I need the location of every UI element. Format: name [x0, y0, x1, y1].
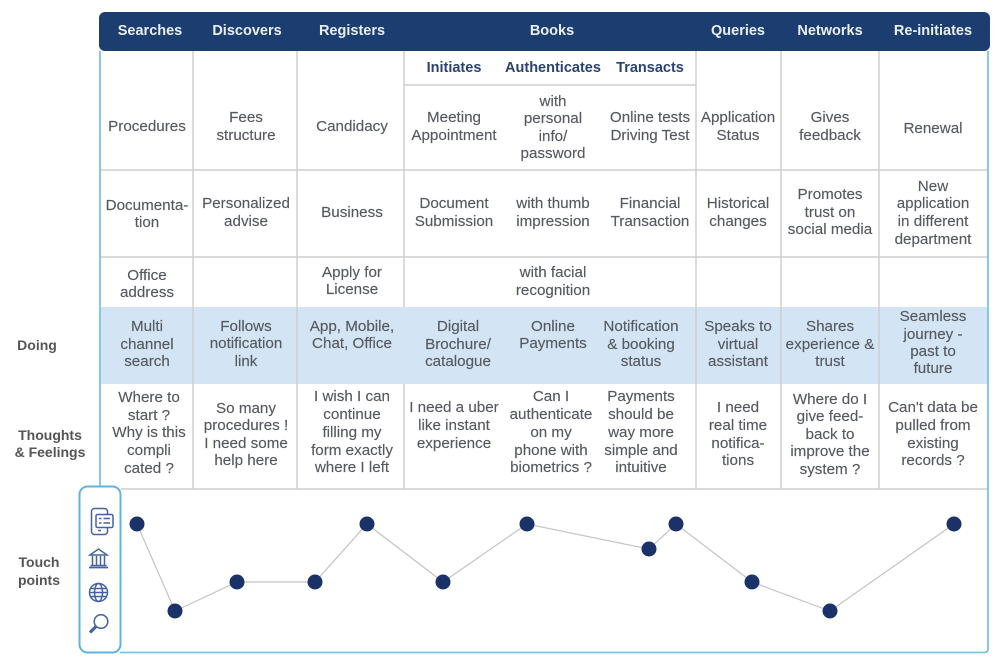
row: thoughts and feelings: biometrics ?	[510, 459, 592, 476]
row: doing: Chat, Office	[312, 335, 392, 352]
row: thoughts and feelings: Can I	[533, 388, 569, 405]
row: thoughts and feelings: I need some	[204, 435, 288, 452]
row: second actions: with thumb	[515, 195, 590, 212]
header bar: Re-initiates	[894, 23, 972, 39]
row: second actions: advise	[224, 213, 268, 230]
row label: touch points	[18, 554, 60, 588]
row: third actions: License	[326, 281, 378, 298]
header bar	[99, 12, 990, 51]
row: thoughts and feelings: where I left	[314, 459, 390, 476]
row: first actions: personal	[524, 110, 582, 127]
row: thoughts and feelings: Where do I	[793, 391, 867, 408]
row: second actions: Personalized	[202, 195, 290, 212]
row: doing: link	[235, 353, 258, 370]
row: doing: Brochure/	[425, 336, 492, 353]
row: thoughts and feelings: should be	[608, 406, 674, 423]
row: thoughts and feelings: help here	[214, 452, 278, 469]
row: doing: Speaks to	[704, 318, 772, 335]
row: thoughts and feelings: system ?	[800, 461, 860, 478]
row: thoughts and feelings: real time	[709, 417, 767, 434]
row: first actions: Meeting	[427, 109, 481, 126]
row: thoughts and feelings: existing	[907, 435, 959, 452]
row: third actions: Apply for	[322, 264, 382, 281]
row: doing: Multi	[131, 318, 163, 335]
icon: mobile payment	[92, 508, 113, 534]
row: thoughts and feelings: phone with	[514, 442, 588, 459]
row: first actions: Fees	[229, 109, 263, 126]
row: first actions: password	[520, 145, 586, 162]
row label: doing: Doing	[17, 337, 57, 353]
row: doing: status	[621, 353, 662, 370]
row: second actions: department	[895, 231, 972, 248]
row: thoughts and feelings: I need a uber	[409, 399, 499, 416]
header bar: Queries	[711, 23, 765, 39]
row: thoughts and feelings: like instant	[418, 417, 491, 434]
row: second actions: application	[897, 195, 969, 212]
row: thoughts and feelings	[112, 388, 978, 478]
row: doing: App, Mobile,	[310, 318, 394, 335]
row: doing: search	[124, 353, 170, 370]
row: thoughts and feelings: I wish I can	[314, 388, 390, 405]
row: doing: experience &	[786, 336, 874, 353]
row: first actions: Application	[701, 109, 775, 126]
books sub-headings: Authenticates	[505, 60, 601, 76]
row: doing: channel	[120, 336, 174, 353]
row: doing: notification	[210, 335, 282, 352]
row: second actions: impression	[516, 213, 590, 230]
row: first actions: feedback	[799, 127, 861, 144]
row: second actions: social media	[788, 221, 873, 238]
row: thoughts and feelings: simple and	[604, 442, 678, 459]
row: doing: Seamless	[900, 308, 967, 325]
row: second actions: Documenta-	[106, 197, 188, 214]
row: thoughts and feelings: notifica-	[711, 435, 765, 452]
row: doing: assistant	[708, 353, 769, 370]
row: thoughts and feelings: intuitive	[615, 459, 667, 476]
row: thoughts and feelings: Payments	[607, 388, 675, 405]
row: doing: Digital	[437, 318, 479, 335]
row: thoughts and feelings: improve the	[790, 443, 870, 460]
row: second actions: Document	[419, 195, 489, 212]
row: second actions: tion	[135, 214, 159, 231]
row label: thoughts and feelings: & Feelings	[15, 444, 86, 460]
row: thoughts and feelings: tions	[722, 452, 754, 469]
row: third actions: recognition	[516, 282, 590, 299]
row: thoughts and feelings: procedures !	[204, 417, 288, 434]
row: doing: & booking	[607, 336, 675, 353]
row: thoughts and feelings: start ?	[128, 407, 170, 424]
row: thoughts and feelings: experience	[417, 435, 491, 452]
row: thoughts and feelings: compli	[127, 442, 171, 459]
row: second actions: changes	[709, 213, 767, 230]
row: doing: Shares	[806, 318, 854, 335]
header bar: Discovers	[212, 23, 282, 39]
row label: touch points: points	[18, 572, 60, 588]
header bar: Books	[530, 23, 574, 39]
row: doing: future	[914, 360, 952, 377]
header bar: Networks	[797, 23, 863, 39]
row: second actions: Financial	[620, 195, 680, 212]
touch points icon panel	[80, 486, 120, 652]
row: thoughts and feelings: give feed-	[797, 408, 863, 425]
row: first actions: Procedures	[108, 118, 186, 135]
row: doing: Online	[531, 318, 575, 335]
row: third actions: with facial	[519, 264, 586, 281]
row: thoughts and feelings: pulled from	[895, 417, 971, 434]
row: second actions: Historical	[707, 195, 769, 212]
row: first actions: Candidacy	[316, 118, 388, 135]
row: doing: Payments	[519, 335, 587, 352]
row: first actions: Renewal	[903, 120, 963, 137]
touch points line chart	[130, 516, 962, 618]
row: second actions: Transaction	[611, 213, 689, 230]
row: thoughts and feelings: records ?	[901, 452, 965, 469]
row: first actions: info/	[539, 128, 568, 145]
row: second actions: New	[918, 178, 948, 195]
row: doing: Notification	[603, 318, 679, 335]
row: second actions: trust on	[805, 204, 855, 221]
row label: touch points: Touch	[19, 554, 59, 570]
header bar: Registers	[319, 23, 385, 39]
row label: thoughts and feelings	[15, 427, 86, 460]
row: thoughts and feelings: Why is this	[112, 424, 186, 441]
row: thoughts and feelings: Where to	[118, 389, 180, 406]
row: doing: trust	[815, 353, 846, 370]
row: thoughts and feelings: So many	[216, 400, 276, 417]
row: thoughts and feelings: cated ?	[124, 460, 174, 477]
row: thoughts and feelings: form exactly	[311, 442, 393, 459]
row: thoughts and feelings: way more	[607, 424, 674, 441]
row: doing: past to	[910, 343, 956, 360]
row: doing: catalogue	[425, 353, 491, 370]
row: thoughts and feelings: authenticate	[510, 406, 592, 423]
row: second actions: Submission	[415, 213, 493, 230]
books sub-headings: Initiates	[427, 60, 481, 76]
row: third actions	[120, 264, 590, 301]
row: thoughts and feelings: on my	[530, 424, 572, 441]
row: doing: virtual	[718, 336, 758, 353]
icon: bank	[89, 549, 108, 568]
row: first actions: Gives	[811, 109, 850, 126]
row: thoughts and feelings: Can't data be	[888, 399, 978, 416]
row: second actions: Promotes	[798, 186, 863, 203]
row: second actions: Business	[321, 204, 383, 221]
icon: globe	[90, 584, 108, 602]
row: thoughts and feelings: continue	[323, 406, 381, 423]
row: first actions	[108, 93, 963, 162]
row: third actions: address	[120, 284, 174, 301]
row label: thoughts and feelings: Thoughts	[18, 427, 82, 443]
row: first actions: with	[538, 93, 567, 110]
row: doing: Follows	[220, 318, 272, 335]
icon: magnifier	[90, 615, 108, 632]
row: doing: journey -	[902, 326, 963, 343]
books sub-headings: Transacts	[616, 60, 684, 76]
row: first actions: Appointment	[411, 127, 497, 144]
row: thoughts and feelings: filling my	[322, 424, 382, 441]
doing row highlight	[100, 307, 988, 384]
row: thoughts and feelings: I need	[717, 399, 759, 416]
row: third actions: Office	[127, 267, 167, 284]
row: first actions: Status	[716, 127, 760, 144]
row: thoughts and feelings: back to	[806, 426, 854, 443]
books sub-headings	[427, 60, 684, 76]
row: first actions: Online tests	[610, 109, 690, 126]
row: doing	[120, 308, 967, 377]
row: second actions: in different	[898, 213, 969, 230]
row: first actions: Driving Test	[610, 127, 690, 144]
header bar: Searches	[118, 23, 182, 39]
row: first actions: structure	[216, 127, 276, 144]
row: second actions	[106, 178, 972, 248]
